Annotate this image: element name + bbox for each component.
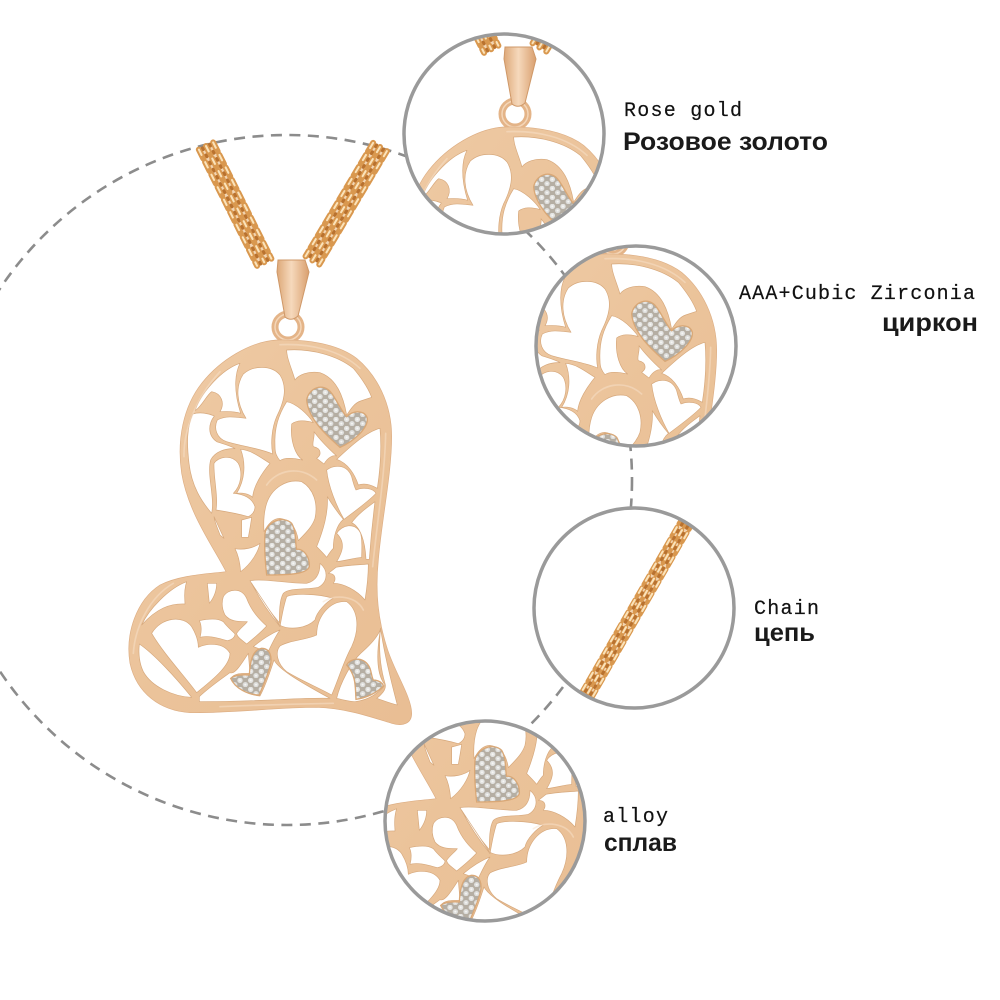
label: rose gold [623, 100, 828, 156]
pave heart: centre [265, 520, 309, 575]
chain: right strand [306, 143, 387, 264]
necklace with heart pendant [129, 142, 412, 725]
chain: left strand [199, 142, 271, 266]
label: cubic zirconia: AAA+Cubic Zirconia [739, 283, 975, 306]
label: chain: цепь [754, 619, 815, 647]
pave heart: upper right [307, 387, 367, 447]
label: alloy [603, 806, 677, 857]
heart cut-outs [139, 350, 397, 705]
openwork heart pendant [129, 340, 412, 725]
heart body [129, 340, 412, 725]
detail circle: alloy [383, 719, 587, 923]
label: chain [754, 598, 819, 647]
detail circle: cubic zirconia [534, 244, 738, 448]
label: cubic zirconia: циркон [882, 309, 978, 337]
label: rose gold: Розовое золото [623, 128, 828, 156]
pendant ring [275, 314, 301, 340]
dashed zoom circle [0, 135, 632, 825]
detail circle: chain [534, 508, 734, 708]
label: alloy: сплав [604, 829, 677, 857]
label: rose gold: Rose gold [624, 100, 742, 123]
label: chain: Chain [754, 598, 819, 621]
label: alloy: alloy [603, 806, 668, 829]
pave heart: lower right [347, 659, 383, 699]
detail circle: rose gold [402, 32, 606, 236]
pendant bail [277, 260, 309, 319]
pave heart: lower centre [231, 648, 271, 695]
rim and bevel highlights [133, 345, 386, 707]
label: cubic zirconia [739, 283, 978, 337]
